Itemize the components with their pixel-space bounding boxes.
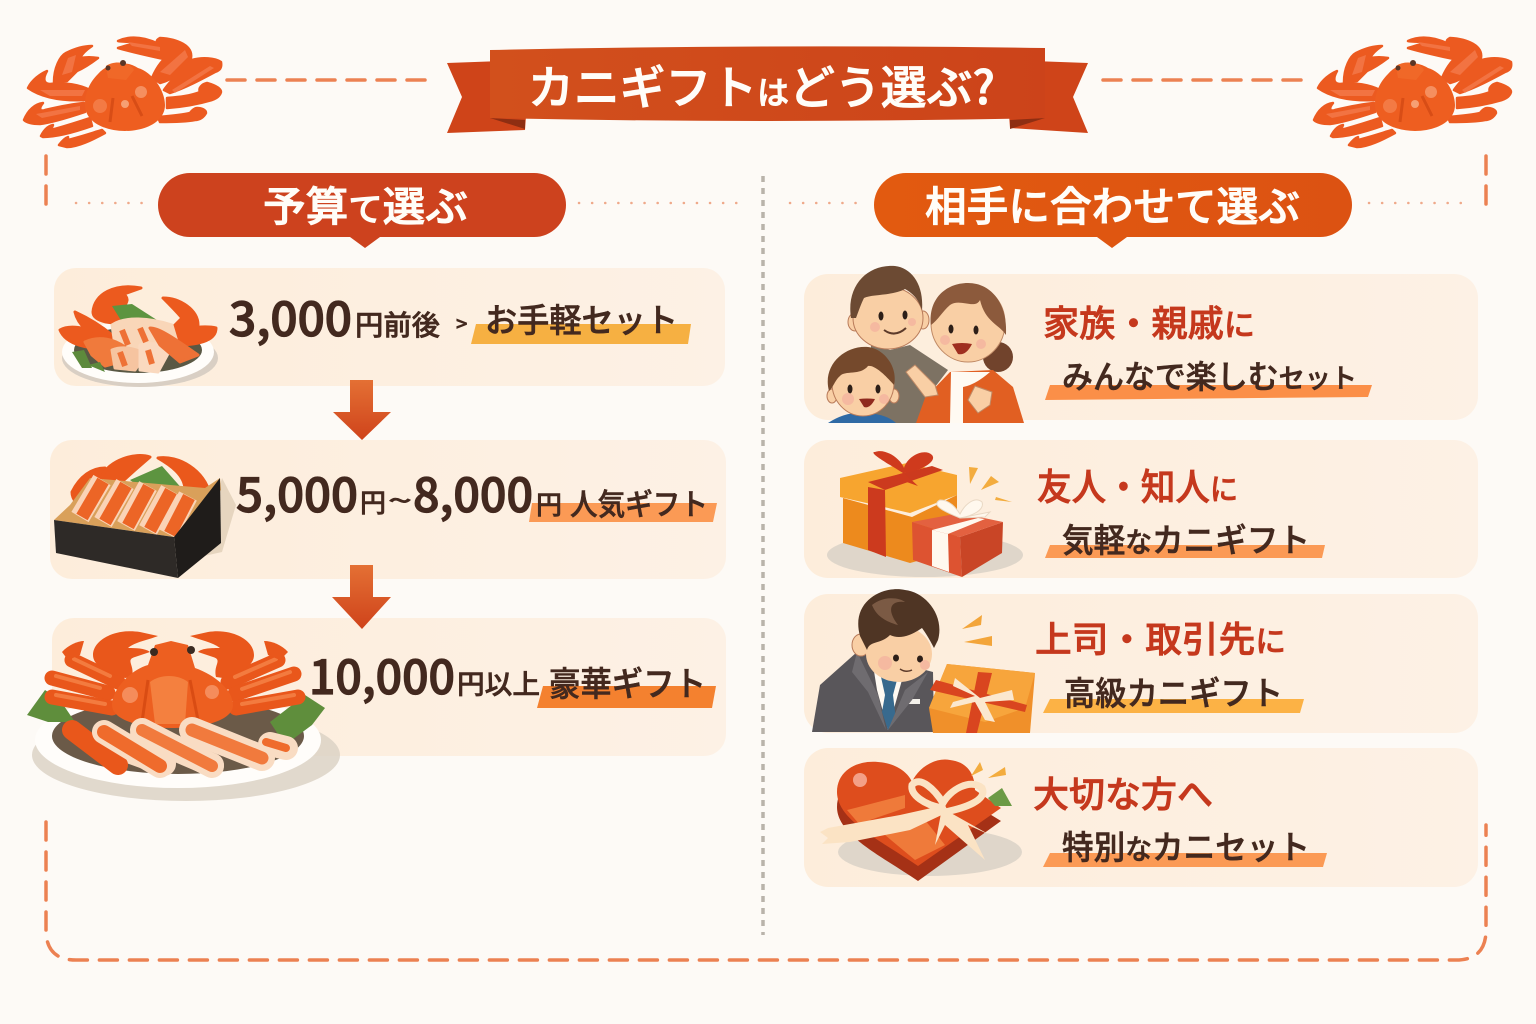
heading dotted rules xyxy=(76,202,1465,204)
label: boss set: 高級カニギフト xyxy=(1064,667,1283,715)
price: 5000-8000: 円 xyxy=(360,483,386,520)
heading: family: 家族・親戚に xyxy=(1043,295,1255,347)
price: 3000: 3,000 xyxy=(229,281,352,350)
center dotted divider xyxy=(761,176,765,935)
icon: businessman with gift xyxy=(812,589,1035,733)
title text: カニギフトはどう選ぶ? xyxy=(528,52,995,118)
icon: whole crab plate xyxy=(27,631,340,801)
label: easy set: お手軽セット xyxy=(485,294,678,342)
label: popular gift: 人気ギフト xyxy=(570,480,708,524)
panel: friends xyxy=(804,440,1478,578)
price: 10000 xyxy=(309,639,540,708)
icon: crab left xyxy=(24,38,221,147)
heading: friends: 友人・知人に xyxy=(1037,457,1238,511)
panel: 10000 yen xyxy=(27,618,726,801)
arrow down 2 xyxy=(332,565,391,629)
label: loved one set: 特別なカニセット xyxy=(1062,821,1310,869)
icon: crab box xyxy=(54,456,236,578)
heading: recipient xyxy=(874,173,1352,248)
heading: loved one: 大切な方へ xyxy=(1033,766,1213,818)
heading: recipient: 相手に合わせて選ぶ xyxy=(925,173,1300,233)
price: 5000-8000: ~ xyxy=(388,481,412,518)
price: 3000 xyxy=(229,281,467,350)
label: luxury gift: 豪華ギフト xyxy=(549,657,706,706)
price: 5000-8000: 5,000 xyxy=(236,457,358,526)
panel: loved one xyxy=(804,748,1478,887)
panel: 3000 yen xyxy=(54,268,725,387)
label: friends set: 気軽なカニギフト xyxy=(1062,514,1310,562)
icon: crab plate small xyxy=(60,287,218,387)
price: 10000: 円以上 xyxy=(457,663,540,702)
label: popular gift: 円 xyxy=(536,485,562,522)
icon: gift boxes xyxy=(827,451,1023,577)
panel: boss xyxy=(804,589,1478,733)
price: 5000-8000: 8,000 xyxy=(413,457,533,526)
heading: budget xyxy=(158,173,566,248)
label: family set: みんなで楽しむセット xyxy=(1062,352,1357,398)
icon: heart gift xyxy=(820,760,1022,881)
price: 5000-8000 xyxy=(236,457,533,526)
icon: crab right xyxy=(1314,38,1511,147)
arrow down 1 xyxy=(333,380,391,440)
price: 3000: > xyxy=(456,308,467,337)
icon: family xyxy=(827,266,1024,423)
panel: family xyxy=(804,266,1478,423)
heading: boss: 上司・取引先に xyxy=(1035,611,1286,663)
panel: 5000-8000 yen xyxy=(50,440,726,579)
price: 10000: 10,000 xyxy=(309,639,455,708)
title ribbon xyxy=(447,46,1088,133)
heading: budget: 予算て選ぶ xyxy=(263,173,468,233)
price: 3000: 円前後 xyxy=(355,304,440,344)
